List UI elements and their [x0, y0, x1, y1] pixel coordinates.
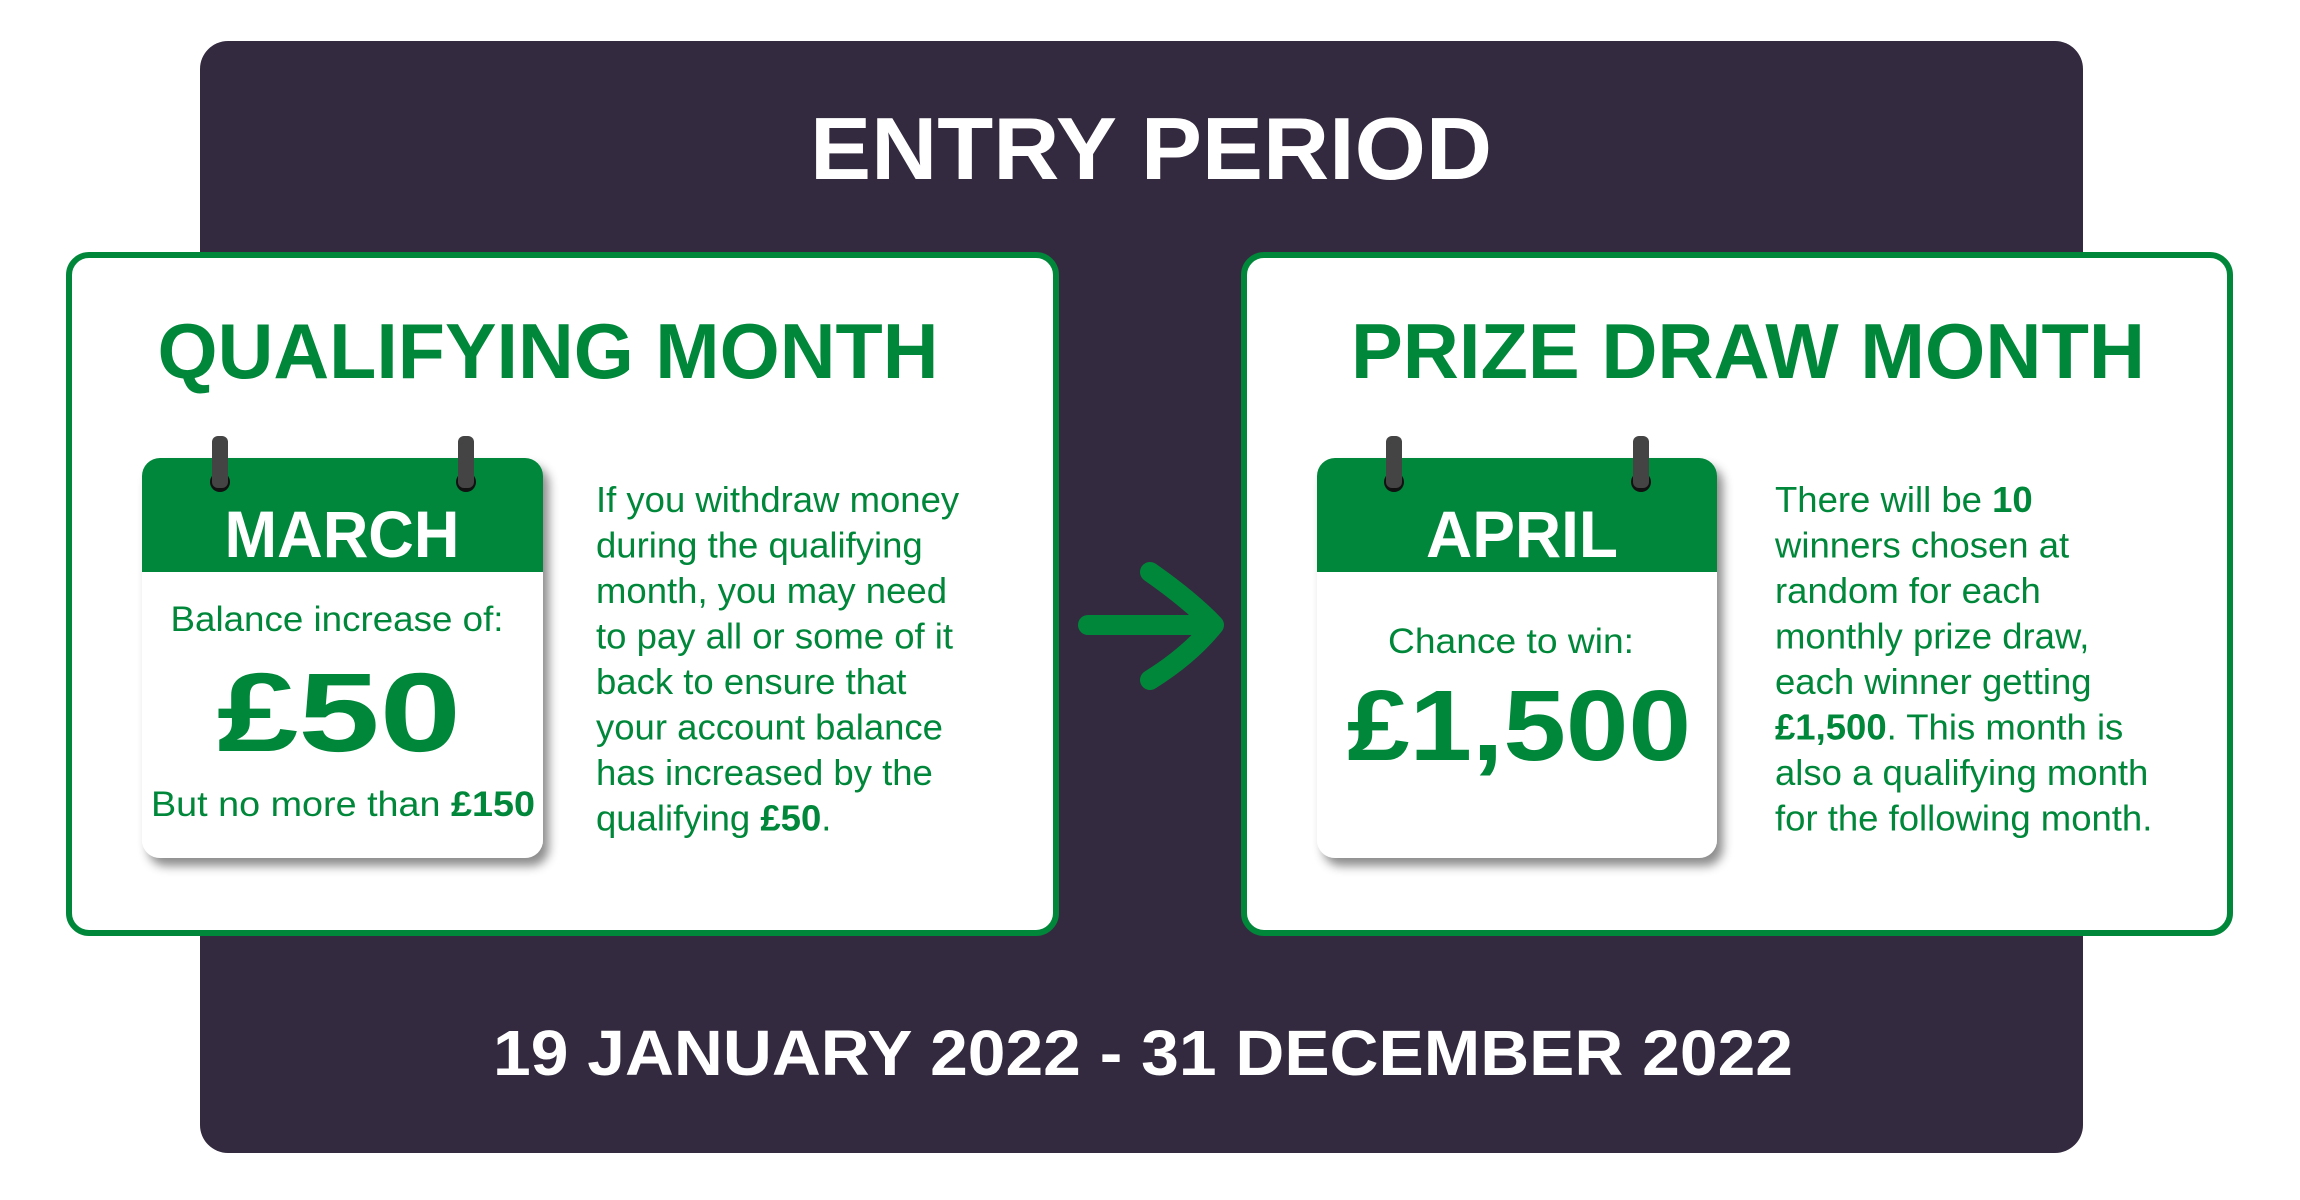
date range: 19 JANUARY 2022 - 31 DECEMBER 2022: [493, 1017, 1793, 1089]
text block: prize draw explanation: monthly prize draw,: [1775, 616, 2089, 656]
title: ENTRY PERIOD: [810, 99, 1492, 198]
text block: prize draw explanation: for the following month.: [1775, 798, 2152, 838]
text block: prize draw explanation: There will be 10: [1775, 479, 2033, 520]
panel: qualifying month: [69, 255, 1056, 933]
calendar: march: But no more than £150: [151, 785, 535, 824]
text block: qualifying explanation: back to ensure that: [596, 661, 906, 702]
panel: prize draw month: [1244, 255, 2230, 933]
arrow: [1088, 572, 1214, 680]
calendar: march: Balance increase of:: [170, 600, 504, 639]
calendar: march: £50: [217, 650, 461, 775]
calendar: april: [1317, 436, 1717, 858]
heading: prize draw month: PRIZE DRAW MONTH: [1351, 307, 2145, 395]
text block: prize draw explanation: £1,500. This month is: [1775, 706, 2123, 748]
calendar: april: Chance to win:: [1388, 622, 1634, 661]
text block: qualifying explanation: during the qualifying: [596, 524, 923, 566]
text block: qualifying explanation: to pay all or some of it: [596, 616, 953, 656]
calendar: april: £1,500: [1347, 670, 1691, 782]
background panel: entry period: [200, 41, 2083, 1153]
text block: qualifying explanation: If you withdraw money: [596, 479, 960, 520]
text block: prize draw explanation: random for each: [1775, 570, 2041, 611]
calendar: march: MARCH: [224, 497, 460, 571]
text block: prize draw explanation: winners chosen at: [1774, 524, 2069, 566]
calendar: march: [142, 436, 543, 858]
text block: prize draw explanation: also a qualifying month: [1775, 752, 2148, 793]
text block: qualifying explanation: has increased by the: [596, 752, 933, 793]
text block: qualifying explanation: your account balance: [596, 706, 943, 748]
text block: qualifying explanation: month, you may need: [596, 570, 947, 611]
calendar: april: APRIL: [1426, 497, 1618, 571]
heading: qualifying month: QUALIFYING MONTH: [158, 307, 938, 395]
text block: prize draw explanation: each winner getting: [1775, 661, 2092, 702]
text block: qualifying explanation: qualifying £50.: [596, 798, 831, 838]
